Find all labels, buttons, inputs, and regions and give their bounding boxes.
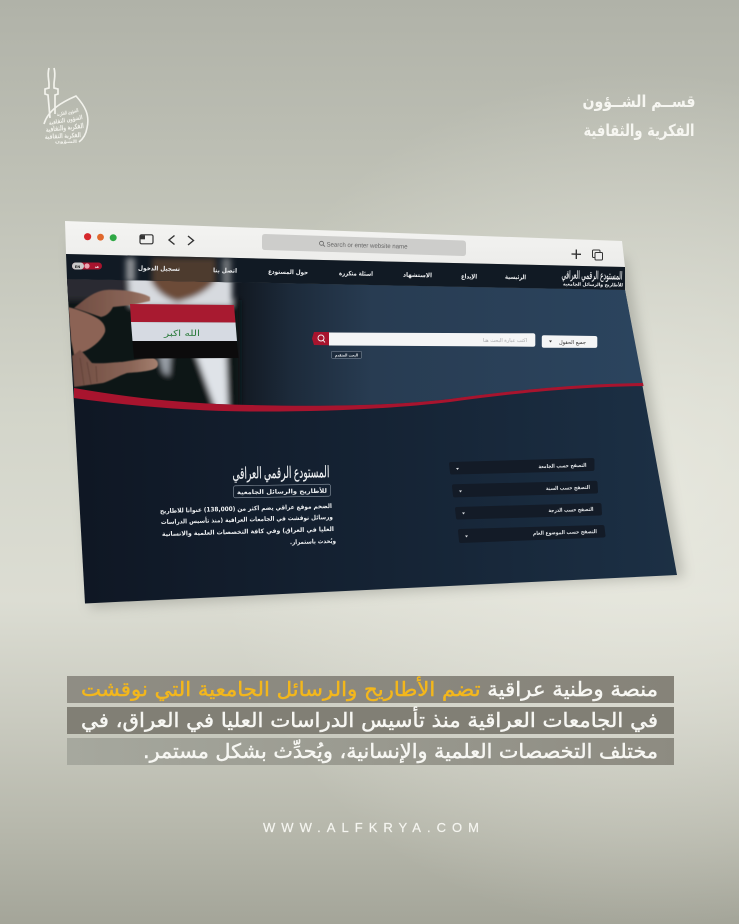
address bar: Search or enter website name (326, 241, 408, 251)
description paragraph: العليا في العراق) وفي كافة التخصصات العلمية والانسانية (162, 526, 334, 538)
site logo in nav: للأطاريح والرسائل الجامعية (563, 280, 623, 289)
icon: copy tabs (592, 250, 602, 260)
navigation links: تسجيل الدخول (138, 265, 180, 273)
dropdown: degree (455, 503, 602, 520)
repository logo: المستودع الرقمي العراقي (232, 464, 330, 484)
dropdown: university (449, 458, 594, 474)
description text bands (67, 676, 674, 765)
advanced search button: البحث المتقدم (335, 352, 358, 358)
navigation links: الإيداع (461, 273, 477, 281)
line 3: مختلف التخصصات العلمية والإنسانية، ويُحدِّث بشكل مستمر. (143, 739, 658, 763)
man seen through nav (126, 258, 231, 286)
dropdown: university: التصفح حسب الجامعة (538, 463, 587, 470)
line 2: في الجامعات العراقية منذ تأسيس الدراسات العليا في العراق، في (81, 706, 658, 733)
heading: department name (582, 92, 696, 141)
icon: minaret and dome logo: الفكرية الثقافية (45, 131, 81, 141)
field selector: جميع الحقول (559, 340, 586, 346)
navigation bar (66, 254, 625, 290)
navigation links: حول المستودع (268, 269, 308, 276)
icon: minaret and dome logo: الفكرية والثقافية (45, 122, 84, 134)
icon: minaret and dome logo: الشؤون الفكرية (56, 108, 79, 118)
browse dropdowns (449, 458, 606, 543)
field selector (542, 335, 597, 348)
icon: minaret and dome logo: الشؤون (55, 140, 78, 145)
card: Iraqi flag (130, 304, 238, 358)
navigation links: الرئيسية (505, 274, 526, 281)
navigation links: اتصل بنا (213, 267, 237, 275)
logo subtitle: للأطاريح والرسائل الجامعية (237, 487, 327, 496)
icon: back and forward arrows (169, 236, 194, 245)
navigation links (138, 265, 526, 281)
hand (68, 290, 158, 387)
heading: department name: الفكرية والثقافية (584, 121, 694, 141)
hero background (67, 279, 643, 406)
man in suit (67, 279, 240, 404)
panel: browser mockup (60, 221, 684, 608)
search input: اكتب عبارة البحث هنا (483, 338, 527, 344)
icon: sidebar (140, 235, 153, 244)
dropdown: degree: التصفح حسب الدرجة (548, 507, 594, 514)
line 1: منصة وطنية عراقية تضم الأطاريح والرسائل الجامعية التي نوقشت (81, 677, 658, 702)
lower page panel (67, 279, 677, 604)
navigation links: اسئلة متكررة (339, 270, 373, 278)
dropdown: subject: التصفح حسب الموضوع العام (533, 529, 597, 537)
hero photo: man with card (67, 279, 240, 404)
dropdown: subject (458, 525, 606, 543)
icon: plus (572, 250, 581, 259)
description paragraph (160, 503, 336, 546)
icon: minaret and dome logo: الشؤون الثقافية (48, 114, 83, 127)
advanced search button (332, 351, 362, 358)
dropdown: year: التصفح حسب السنة (546, 485, 590, 492)
logo subtitle (233, 484, 331, 498)
language toggle: EN (75, 265, 80, 269)
browser chrome bar (65, 221, 625, 267)
navigation links: الاستشهاد (403, 272, 432, 279)
dropdown: year (452, 481, 598, 497)
language toggle (72, 262, 102, 270)
search button (312, 332, 329, 345)
search form (312, 332, 597, 358)
language toggle: عد (95, 265, 100, 269)
description paragraph: الضخم موقع عراقي يضم اكثر من (138,000) عنوانا للاطاريح (160, 503, 332, 515)
window buttons (84, 233, 117, 241)
address bar (262, 234, 466, 256)
card: Iraqi flag: الله اكبر (163, 329, 200, 339)
description paragraph: ورسائل نوقشت في الجامعات العراقية (منذ تأسيس الدراسات (161, 513, 333, 526)
icon: minaret and dome logo (44, 68, 88, 145)
red curved band (74, 383, 644, 412)
heading: department name: قســم الشــؤون (582, 92, 696, 112)
description paragraph: ويُحدث باستمرار. (290, 538, 336, 546)
website address: WWW.ALFKRYA.COM (263, 820, 479, 835)
search input (329, 332, 535, 347)
site logo in nav: المستودع الرقمي العراقي (561, 269, 623, 283)
site logo in nav (561, 269, 623, 289)
about block (160, 464, 336, 546)
